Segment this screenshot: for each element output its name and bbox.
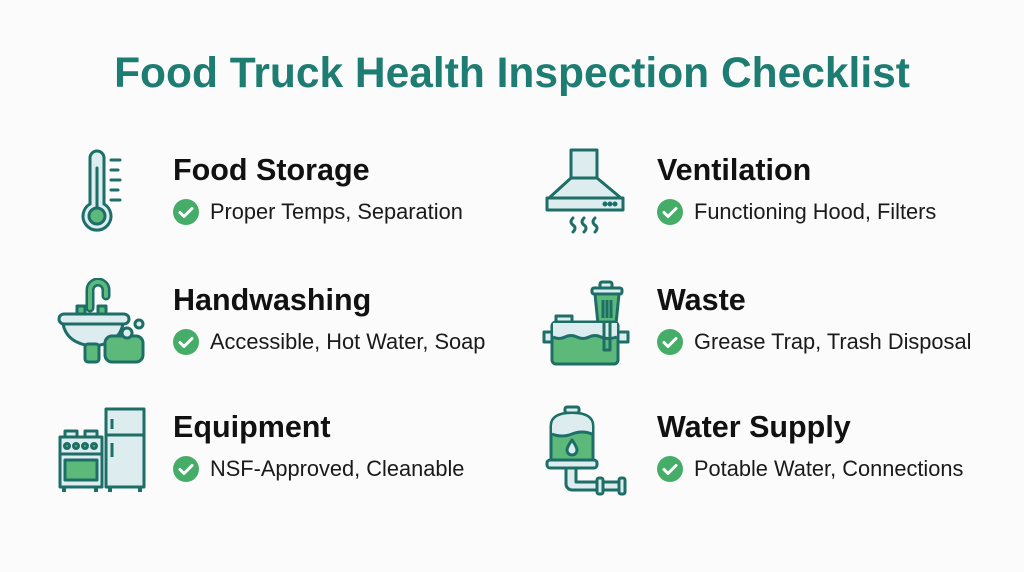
item: handwashing: Accessible, Hot Water, Soap	[210, 329, 485, 354]
item: food storage	[173, 153, 463, 225]
item: water supply	[657, 410, 963, 482]
item: waste: Grease Trap, Trash Disposal	[694, 329, 971, 354]
item: ventilation: Functioning Hood, Filters	[694, 199, 936, 224]
icon: range hood	[546, 148, 624, 234]
item: handwashing	[173, 283, 485, 355]
icon: stove and fridge	[58, 408, 146, 492]
item: ventilation: Ventilation	[657, 153, 811, 187]
item: handwashing: Handwashing	[173, 283, 371, 317]
icon: sink	[58, 278, 144, 364]
item: equipment	[173, 410, 464, 482]
item: ventilation	[657, 153, 936, 225]
icon: thermometer	[81, 150, 122, 232]
item: food storage: Food Storage	[173, 153, 370, 187]
item: equipment: NSF-Approved, Cleanable	[210, 456, 464, 481]
icon: water tank	[546, 406, 626, 496]
icon: grease trap and trash	[542, 280, 630, 366]
item: waste: Waste	[657, 283, 746, 317]
title: Food Truck Health Inspection Checklist	[114, 50, 910, 97]
item: equipment: Equipment	[173, 410, 331, 444]
item: water supply: Water Supply	[657, 410, 851, 444]
item: waste	[657, 283, 971, 355]
item: water supply: Potable Water, Connections	[694, 456, 963, 481]
item: food storage: Proper Temps, Separation	[210, 199, 463, 224]
